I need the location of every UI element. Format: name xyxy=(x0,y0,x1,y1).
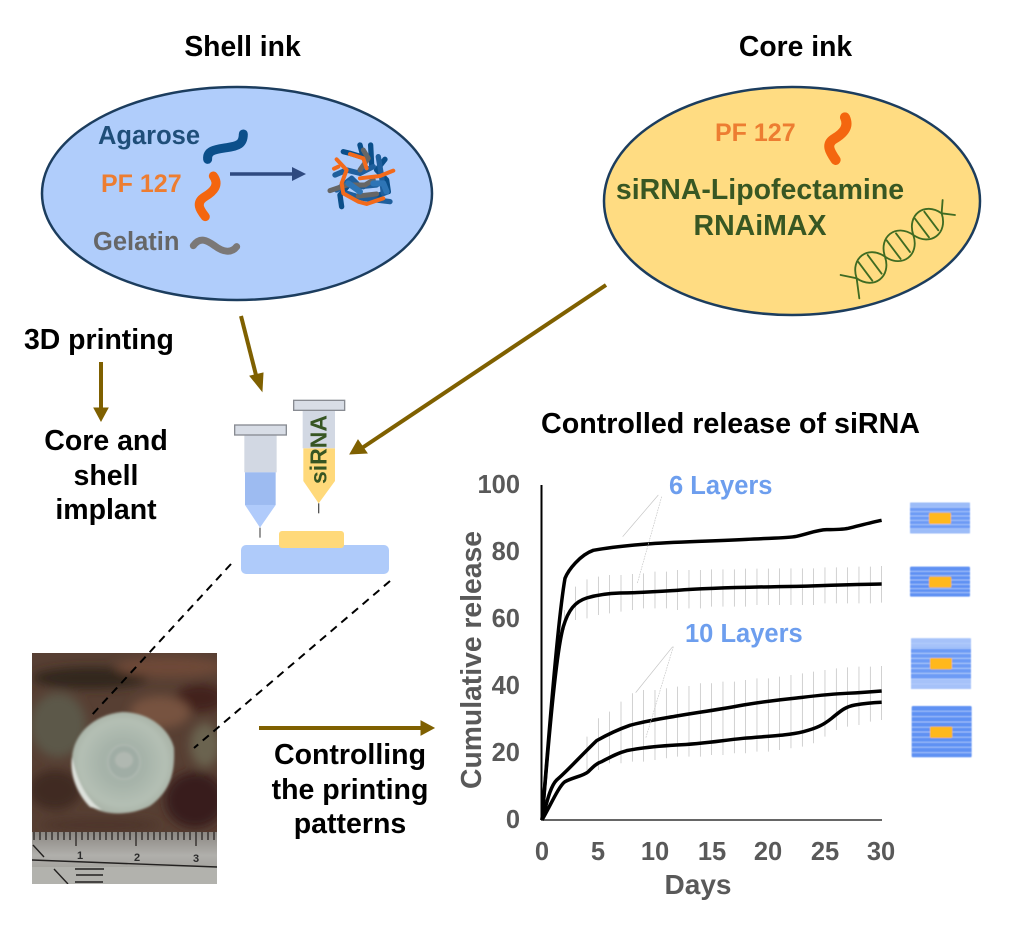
y axis labels: 80 xyxy=(492,538,520,566)
x axis xyxy=(541,819,882,821)
label: core and shell implant: implant xyxy=(55,494,157,526)
y axis labels: 60 xyxy=(492,605,520,633)
y axis labels: 20 xyxy=(492,739,520,767)
x axis labels: 5 xyxy=(591,838,605,866)
heading: core ink: Core ink xyxy=(739,30,852,62)
icon: agarose strand xyxy=(208,134,243,159)
x axis labels: 25 xyxy=(811,838,839,866)
panel: bioprinter nozzles and print xyxy=(235,400,389,574)
label: gelatin: Gelatin xyxy=(93,228,179,256)
implant disc xyxy=(71,712,174,814)
icon: core syringe xyxy=(294,400,345,513)
arrow: implant to controlled patterns xyxy=(259,721,434,735)
icon: PF 127 strand xyxy=(199,176,216,217)
ruler: 1 xyxy=(77,850,83,862)
arrow: shell ink to printer xyxy=(241,316,263,391)
icon: 6 layer pattern B xyxy=(910,567,970,597)
x axis labels: 10 xyxy=(641,838,669,866)
label: siRNA-Lipofectamine RNAiMAX: RNAiMAX xyxy=(694,210,826,242)
leader lines xyxy=(623,495,673,738)
x axis title: Days xyxy=(665,869,731,900)
x axis labels: 15 xyxy=(698,838,726,866)
icon: shell syringe xyxy=(235,425,286,538)
arrow: printing to implant xyxy=(94,362,108,421)
label: agarose: Agarose xyxy=(98,122,200,150)
label: core and shell implant: Core and xyxy=(44,425,168,457)
x axis labels: 30 xyxy=(867,838,895,866)
label: PF 127: PF 127 xyxy=(101,170,182,198)
icon: printed shell base xyxy=(241,545,389,574)
arrow: core ink to printer xyxy=(350,285,606,454)
ruler: 2 xyxy=(134,852,140,864)
icon: crosslinked network xyxy=(330,145,393,207)
zoom line: right dashed xyxy=(194,581,390,748)
icon: printed core xyxy=(279,531,344,548)
x axis labels: 20 xyxy=(754,838,782,866)
icon: 6 layer pattern A xyxy=(910,503,970,533)
y axis labels: 100 xyxy=(477,471,520,499)
y axis labels: 0 xyxy=(506,806,520,834)
icon: gelatin strand xyxy=(193,240,237,251)
label: controlling the printing patterns: patterns xyxy=(294,808,406,840)
y axis xyxy=(540,485,542,820)
series label: 6 layers: 6 Layers xyxy=(669,472,772,500)
icon: 10 layer pattern B xyxy=(912,706,972,757)
x axis labels: 0 xyxy=(535,838,549,866)
chart: cumulative release over days xyxy=(455,471,895,900)
icon: DNA helix xyxy=(841,200,955,298)
series label: 10 layers: 10 Layers xyxy=(685,620,803,648)
ruler xyxy=(32,832,217,884)
icons: layer pattern legend xyxy=(910,503,972,757)
heading: shell ink: Shell ink xyxy=(184,30,301,62)
y axis labels: 40 xyxy=(492,672,520,700)
zoom line: left dashed xyxy=(90,564,231,717)
label: controlling the printing patterns: the printing xyxy=(272,774,428,806)
ruler: 3 xyxy=(193,853,199,865)
panel: core ink ellipse xyxy=(604,87,980,315)
release curves xyxy=(542,520,882,820)
label: 3D printing: 3D printing xyxy=(24,324,174,356)
error bars xyxy=(564,566,882,770)
label: siRNA-Lipofectamine RNAiMAX: siRNA-Lipofectamine xyxy=(616,174,904,206)
label: siRNA on syringe: siRNA xyxy=(306,415,332,484)
panel: shell ink ellipse xyxy=(42,87,432,300)
photo: printed implant with ruler xyxy=(29,653,225,884)
label: core and shell implant: shell xyxy=(74,460,138,492)
label: controlling the printing patterns: Controlling xyxy=(274,739,426,771)
icon: 10 layer pattern A xyxy=(911,638,971,689)
icon: PF 127 strand xyxy=(829,117,846,160)
y axis title: Cumulative release xyxy=(455,531,487,789)
arrow: agarose and PF 127 and gelatin combine xyxy=(230,167,306,181)
label: PF 127: PF 127 xyxy=(715,119,796,147)
heading: controlled release of siRNA: Controlled release of siRNA xyxy=(541,408,920,440)
